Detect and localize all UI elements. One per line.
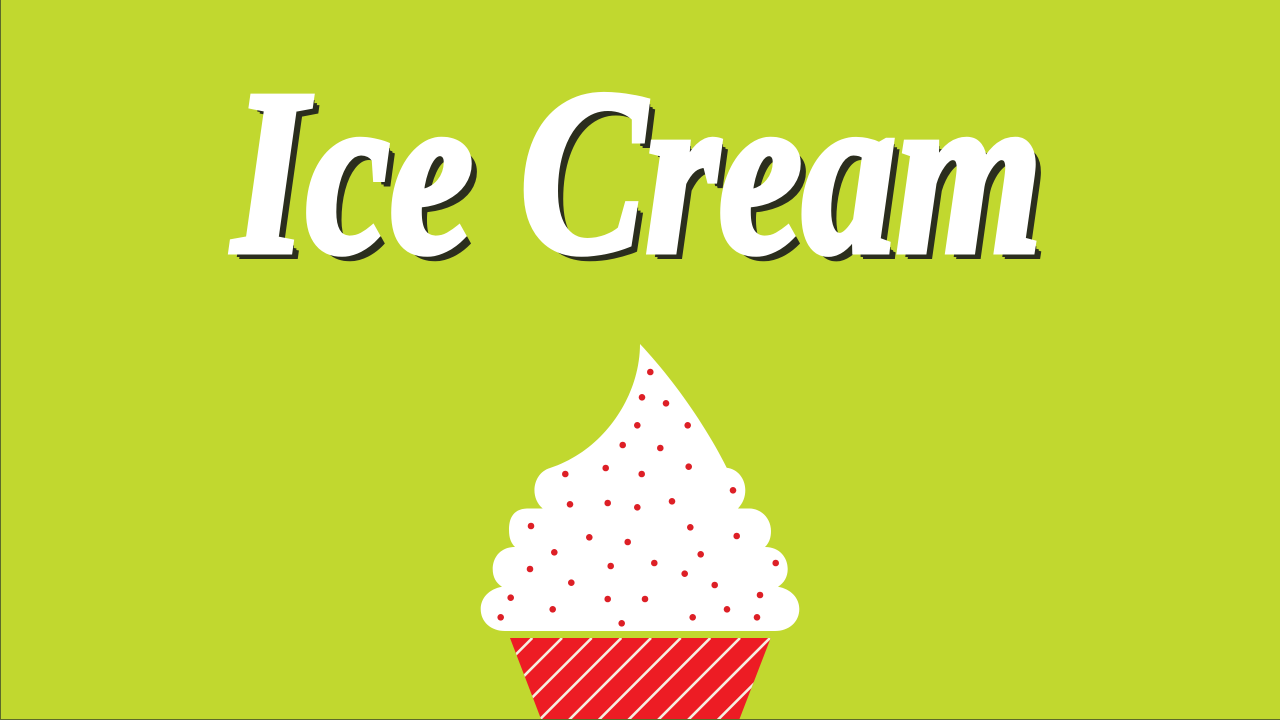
icon: white swirl of ice cream (481, 344, 799, 631)
title: Ice Cream (233, 42, 1042, 302)
illustration: ice cream cupcake (480, 344, 800, 719)
sprinkles: red dots (497, 369, 779, 627)
icon: red striped cup (510, 638, 771, 719)
